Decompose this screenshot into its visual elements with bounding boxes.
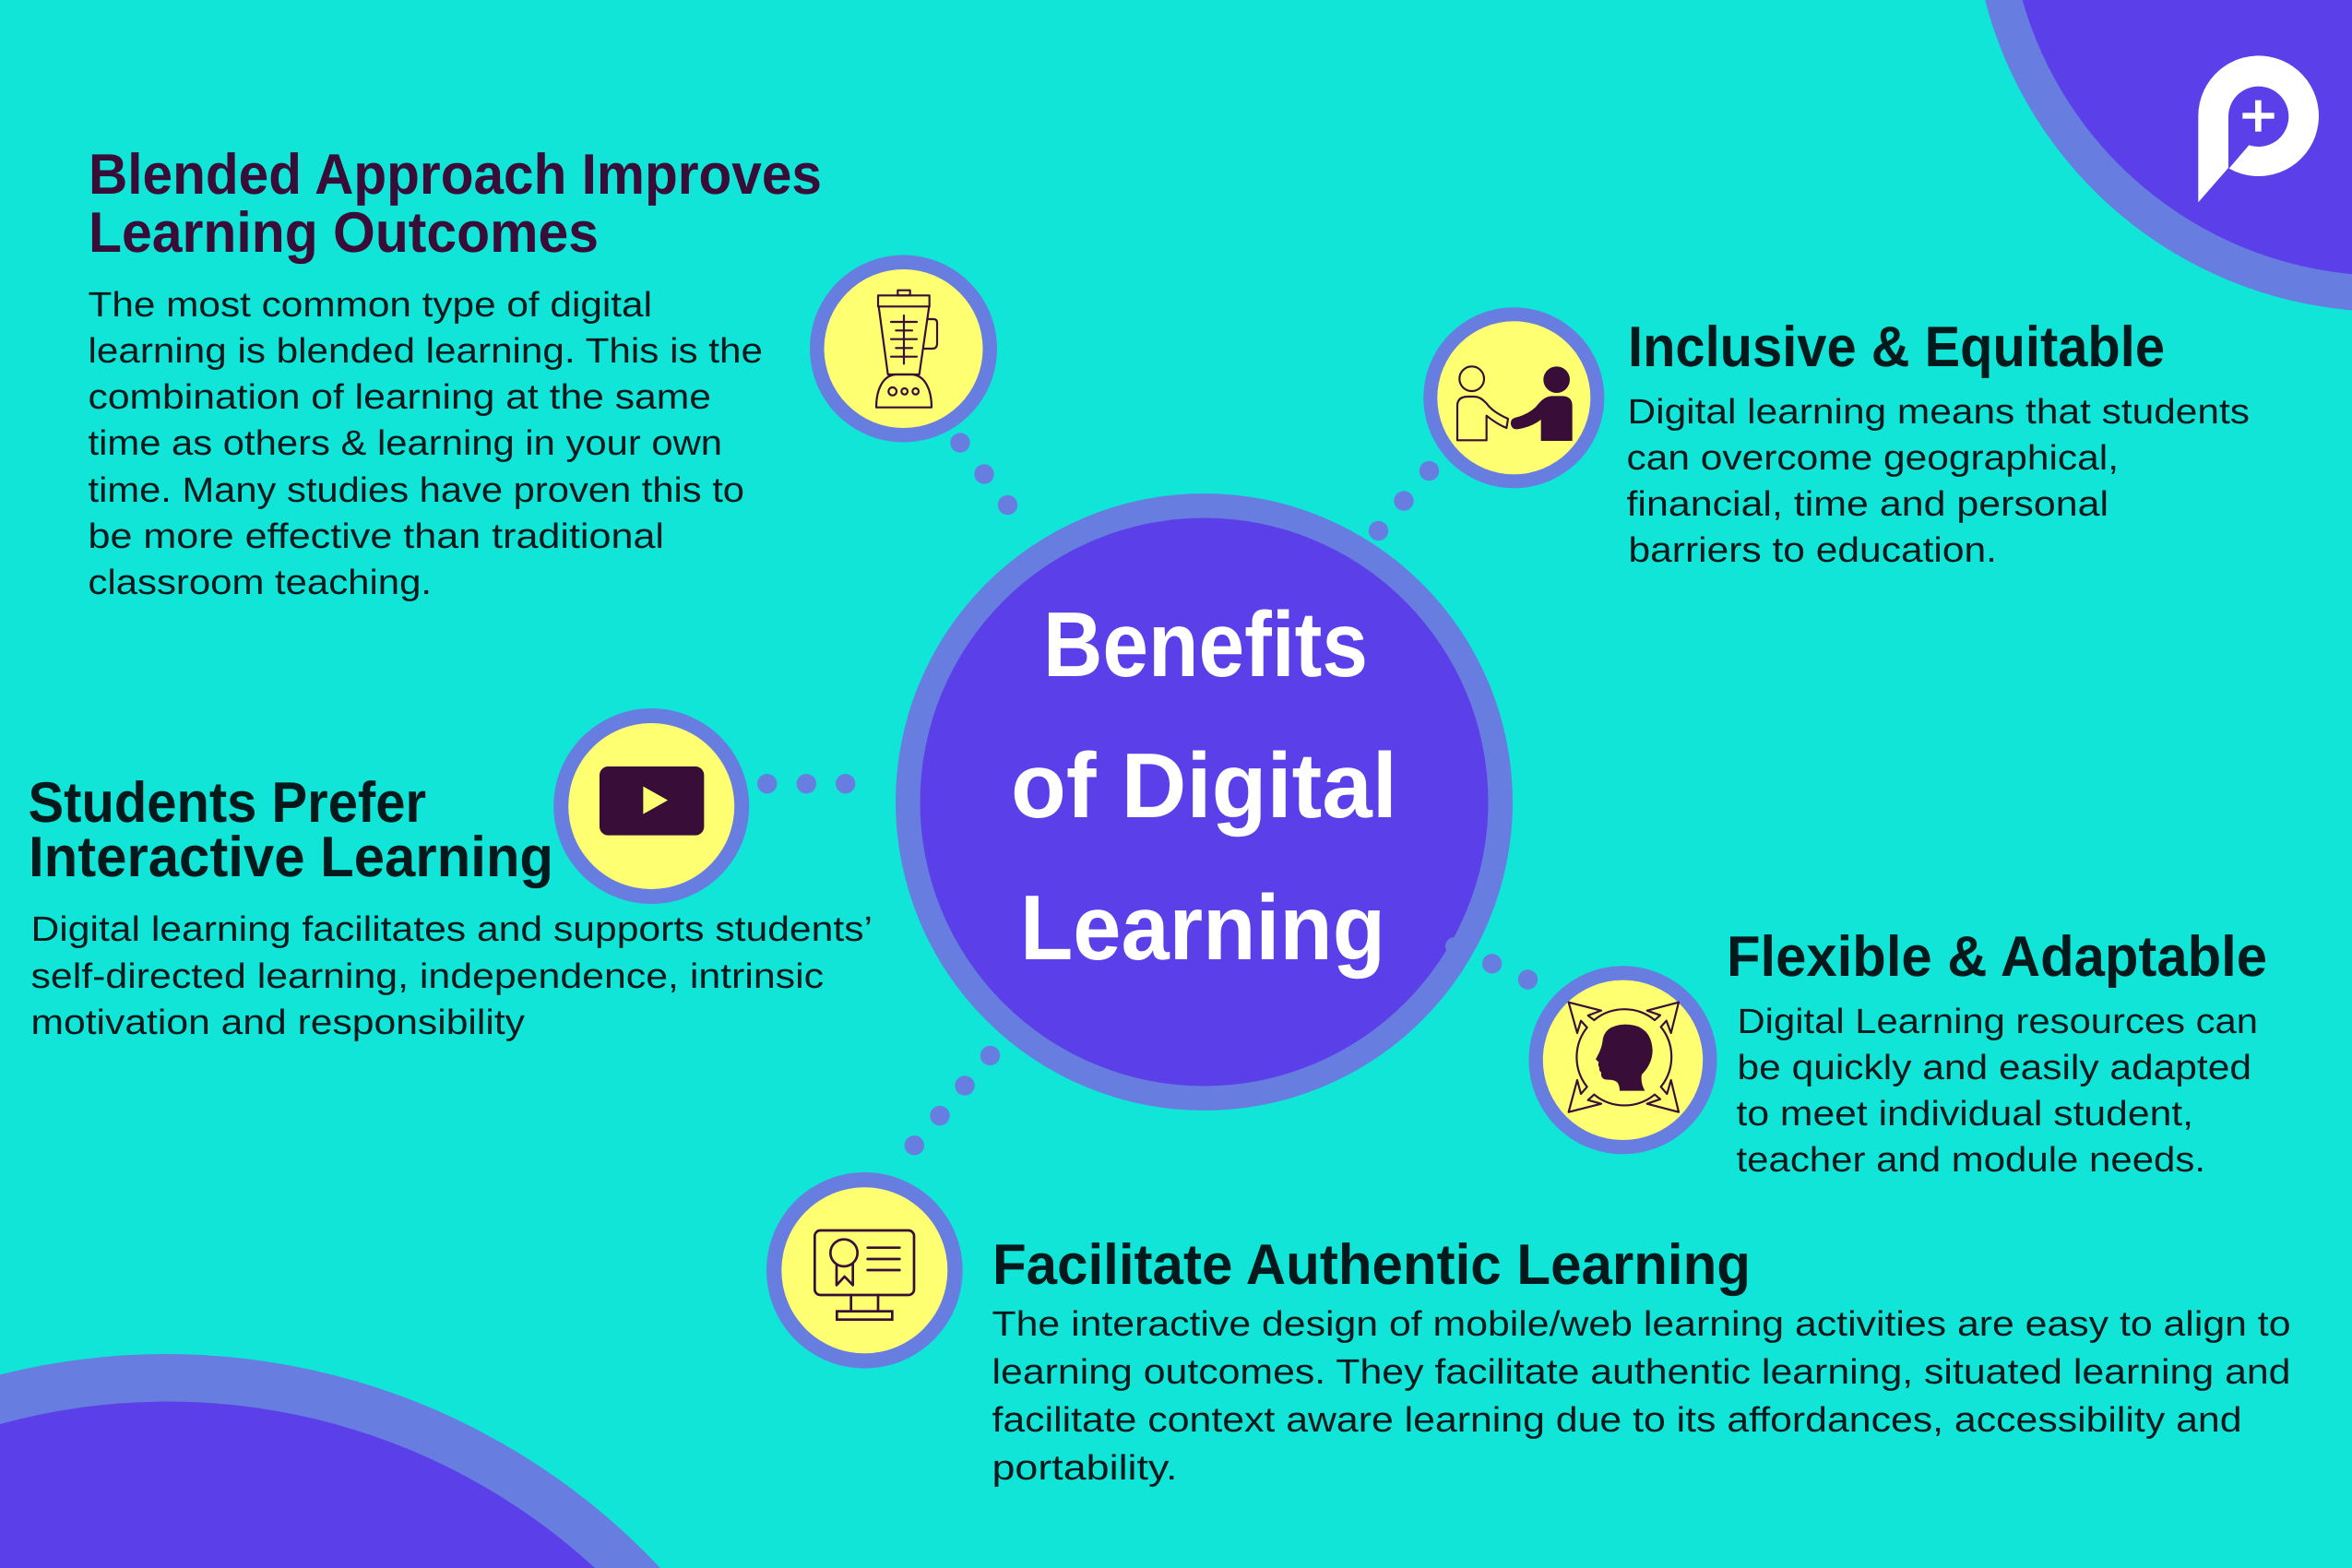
heading: inclusive and equitable: Inclusive & Equitable — [1628, 315, 2165, 379]
icon: blender — [810, 255, 997, 443]
text block: inclusive body: financial, time and personal — [1627, 485, 2108, 524]
panel: blended approach — [89, 143, 822, 602]
text block: interactive body — [31, 910, 873, 1042]
icon: video play — [553, 708, 749, 904]
text block: inclusive body: Digital learning means that students — [1627, 393, 2250, 432]
text block: blended approach body: classroom teaching. — [89, 564, 432, 602]
text block: inclusive body — [1627, 393, 2250, 570]
text block: blended approach body: be more effective than traditional — [89, 517, 664, 556]
text block: blended approach body: The most common type of digital — [89, 286, 652, 325]
text block: blended approach body: learning is blended learning. This is the — [89, 332, 763, 371]
text block: authentic body: learning outcomes. They facilitate authentic learning, situated learning and — [992, 1353, 2291, 1392]
text block: inclusive body: barriers to education. — [1629, 531, 1997, 570]
panel: students prefer interactive learning — [28, 771, 873, 1042]
text block: flexible body: Digital Learning resources can — [1738, 1003, 2258, 1041]
heading: students prefer: Interactive Learning — [29, 826, 553, 889]
title: of Digital — [1011, 734, 1397, 837]
text block: authentic body — [992, 1305, 2291, 1488]
icon: head with arrows — [1529, 966, 1717, 1154]
heading: students prefer — [28, 771, 553, 889]
text block: blended approach body — [89, 286, 763, 602]
text block: blended approach body: time as others & learning in your own — [89, 424, 722, 463]
heading: blended approach: Blended Approach Improves — [89, 143, 822, 207]
text block: authentic body: facilitate context aware learning due to its affordances, accessibility and — [992, 1401, 2241, 1440]
icon: handshake — [1423, 307, 1604, 488]
text block: authentic body: portability. — [992, 1449, 1177, 1488]
text block: flexible body: be quickly and easily adapted — [1738, 1049, 2251, 1087]
panel: flexible and adaptable — [1727, 925, 2267, 1180]
connector dots: interactive — [757, 774, 855, 793]
icon: plus logo — [2198, 55, 2319, 202]
text block: flexible body: teacher and module needs. — [1736, 1141, 2205, 1180]
text block: interactive body: motivation and responsibility — [31, 1004, 525, 1042]
top-right corner decoration with logo — [1985, 0, 2352, 310]
title: Benefits — [1043, 593, 1368, 696]
text block: flexible body: to meet individual student, — [1736, 1095, 2193, 1134]
connector dots: inclusive — [1369, 461, 1439, 540]
text block: blended approach body: combination of learning at the same — [89, 378, 711, 417]
connector dots: authentic — [905, 1046, 1000, 1156]
bottom-left corner decoration — [0, 1354, 660, 1568]
title — [1011, 593, 1397, 980]
heading: flexible and adaptable: Flexible & Adaptable — [1727, 925, 2267, 989]
heading: blended approach — [89, 143, 822, 265]
connector dots: blended approach — [950, 433, 1017, 515]
heading: students prefer: Students Prefer — [28, 771, 426, 835]
text block: flexible body — [1736, 1003, 2258, 1180]
text block: interactive body: self-directed learning, independence, intrinsic — [31, 957, 824, 996]
heading: blended approach: Learning Outcomes — [89, 201, 599, 265]
icon: certificate monitor — [766, 1172, 963, 1369]
connector dots: flexible — [1482, 954, 1538, 990]
text block: inclusive body: can overcome geographical, — [1627, 439, 2119, 478]
text block: authentic body: The interactive design of mobile/web learning activities are easy to align to — [992, 1305, 2291, 1344]
title: Learning — [1020, 876, 1385, 980]
text block: interactive body: Digital learning facilitates and supports students’ — [31, 910, 873, 949]
heading: facilitate authentic learning: Facilitate Authentic Learning — [992, 1233, 1751, 1297]
panel: facilitate authentic learning — [992, 1233, 2291, 1488]
text block: blended approach body: time. Many studies have proven this to — [89, 471, 744, 510]
panel: inclusive and equitable — [1627, 315, 2250, 570]
central circle with title — [896, 493, 1513, 1111]
